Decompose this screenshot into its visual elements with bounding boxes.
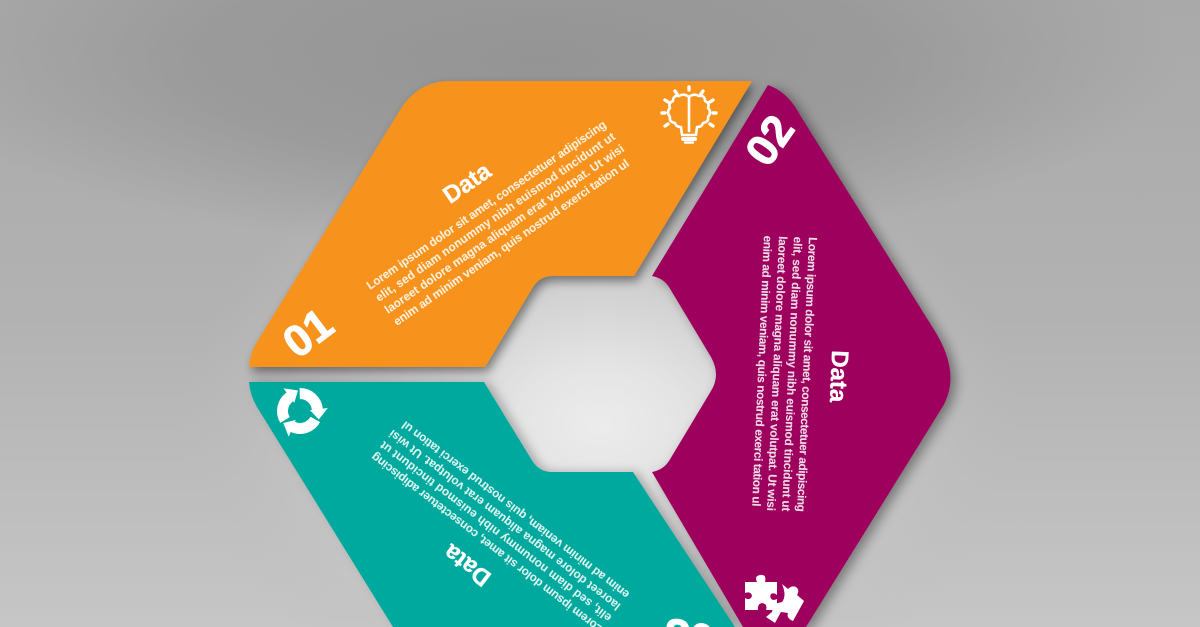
panel: purple 02	[652, 85, 950, 627]
text block: teal body: elit, sed diam nonummy nibh euismod tincidunt ut	[377, 438, 614, 625]
text block: orange body: enim ad minim veniam, quis nostrud exerci tation ul	[391, 156, 632, 328]
text block: orange body: Lorem ipsum dolor sit amet, consectetuer adipiscing	[364, 117, 609, 292]
panel: teal 03	[249, 382, 735, 627]
orange shape	[249, 81, 752, 367]
number 01: 01	[274, 299, 343, 368]
text block: purple body: laoreet dolore magna aliquam erat volutpat. Ut wisi	[764, 236, 790, 511]
text block: orange body: elit, sed diam nonummy nibh euismod tincidunt ut	[373, 129, 618, 304]
heading: Data: Data	[824, 350, 853, 404]
text block: teal body: laoreet dolore magna aliquam erat volutpat. Ut wisi	[386, 427, 623, 613]
heading: Data: Data	[438, 157, 497, 209]
text block: purple body: Lorem ipsum dolor sit amet, consectetuer adipiscing	[794, 237, 820, 512]
text block: purple body: enim ad minim veniam, quis nostrud exerci tation ul	[749, 235, 775, 507]
number 02: 02	[736, 107, 804, 175]
icon: puzzle pieces	[745, 575, 804, 623]
teal shape	[249, 382, 735, 627]
icon: recycle arrows	[281, 388, 328, 437]
heading: Data: Data	[438, 538, 496, 591]
icon: light bulb brain	[662, 87, 716, 142]
purple shape	[652, 85, 950, 627]
text block: teal body: enim ad minim veniam, quis nostrud exerci tation ul	[399, 418, 632, 602]
text block: orange body: laoreet dolore magna aliquam erat volutpat. Ut wisi	[382, 141, 627, 316]
text block: purple body: elit, sed diam nonummy nibh euismod tincidunt ut	[779, 236, 805, 512]
text block: purple body	[749, 235, 820, 512]
panel: orange 01	[249, 81, 752, 368]
